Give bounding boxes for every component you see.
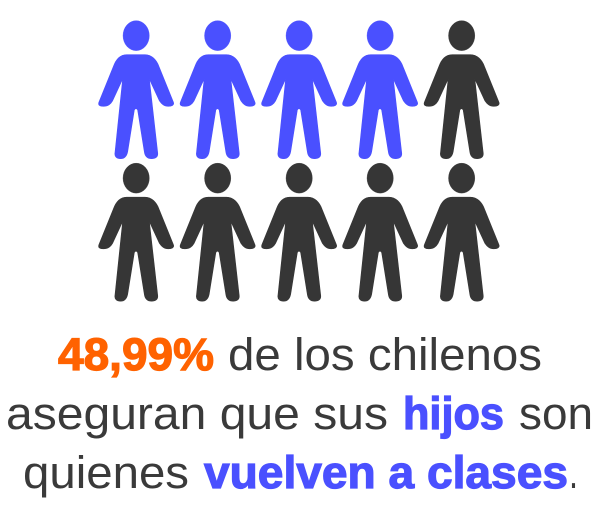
icon: dark person 5	[424, 21, 499, 159]
icon: blue person 1	[99, 21, 174, 159]
icon: blue person 3	[262, 21, 337, 159]
icon: dark person 8	[262, 163, 337, 301]
caption line 2: son	[519, 388, 593, 439]
icon: dark person 7	[180, 163, 255, 301]
caption line 2: hijos	[403, 388, 504, 439]
icon: dark person 10	[424, 163, 499, 301]
icon: dark person 9	[343, 163, 418, 301]
caption line 2: aseguran que sus	[6, 388, 388, 439]
caption line 1: de los chilenos	[228, 329, 542, 380]
caption line 3: .	[569, 447, 578, 498]
caption line 1: 48,99%	[58, 329, 214, 380]
icon: blue person 2	[180, 21, 255, 159]
caption text	[6, 329, 593, 498]
caption line 3: vuelven a clases	[204, 447, 568, 498]
icon: dark person 6	[99, 163, 174, 301]
icon: blue person 4	[343, 21, 418, 159]
caption line 3: quienes	[23, 447, 189, 498]
pictogram: 10 people, 5 highlighted	[99, 21, 499, 301]
